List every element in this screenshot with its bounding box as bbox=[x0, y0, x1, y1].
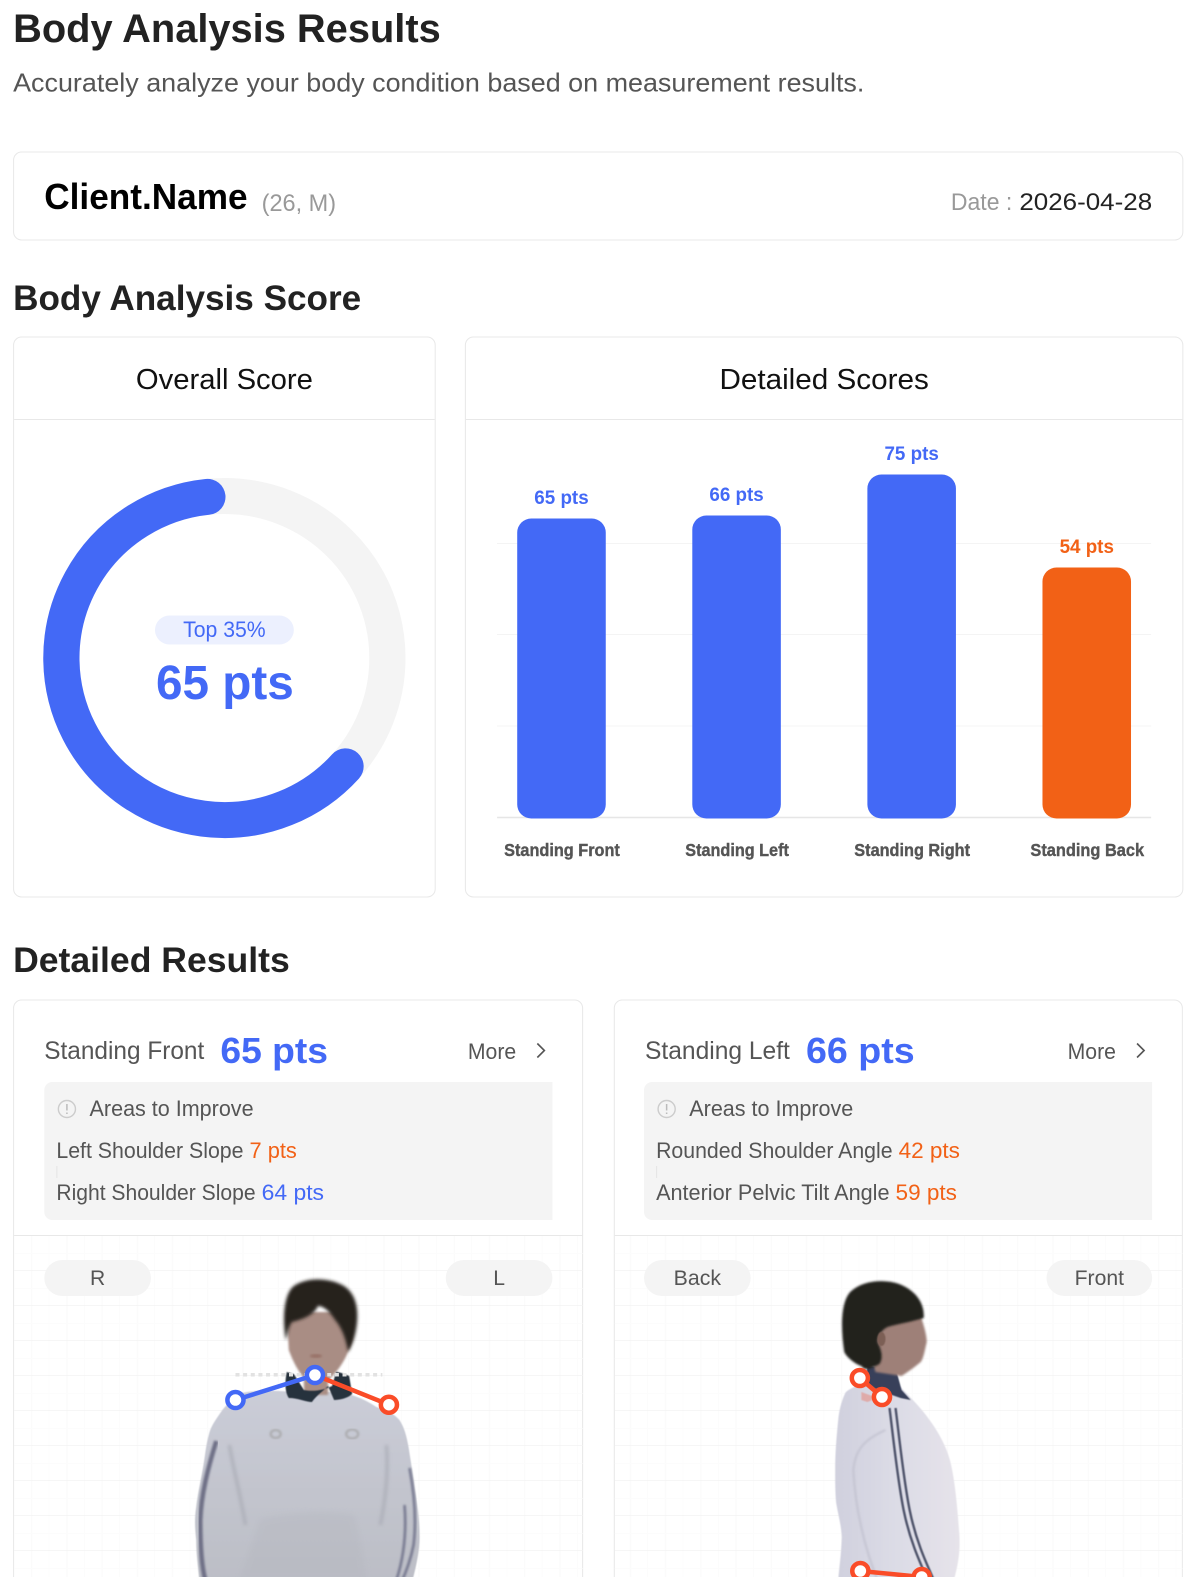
icon: alert bbox=[58, 1100, 75, 1118]
card header: standing left score: Standing Left bbox=[645, 1037, 790, 1065]
bar: standing right: Standing Right bbox=[854, 840, 970, 860]
label: R: R bbox=[90, 1267, 105, 1290]
marker: front pelvis bbox=[914, 1569, 930, 1577]
client age and sex: (26, M) bbox=[262, 190, 336, 217]
areas to improve box: Left Shoulder Slope bbox=[56, 1138, 244, 1163]
areas to improve box bbox=[644, 1082, 1152, 1220]
areas to improve box: Areas to Improve bbox=[90, 1096, 254, 1121]
date: 2026-04-28 bbox=[1019, 189, 1152, 216]
label: front: Front bbox=[1075, 1267, 1124, 1290]
marker: lower shoulder bbox=[874, 1389, 890, 1405]
areas to improve box: 42 pts bbox=[899, 1138, 960, 1163]
bar: standing front bbox=[504, 487, 620, 860]
card header: standing left score bbox=[645, 1030, 1144, 1071]
card header: standing left score: 66 pts bbox=[806, 1030, 915, 1071]
card header: standing left score: More bbox=[1068, 1039, 1116, 1064]
label: R bbox=[44, 1260, 151, 1296]
shoulder slope overlay bbox=[227, 1367, 397, 1413]
figure: front view person bbox=[195, 1279, 420, 1577]
posture overlay bbox=[852, 1370, 930, 1577]
panel: standing front result bbox=[14, 1000, 583, 1577]
areas to improve box: Rounded Shoulder Angle bbox=[656, 1138, 893, 1163]
bar: standing left bbox=[685, 484, 789, 860]
bar: standing front: 65 pts bbox=[534, 487, 589, 509]
overall score value: 65 pts bbox=[156, 656, 294, 710]
label: L bbox=[446, 1260, 552, 1296]
icon: alert bbox=[658, 1100, 675, 1118]
panel: detailed scores bbox=[465, 337, 1183, 897]
areas to improve box: 7 pts bbox=[250, 1138, 297, 1163]
panel: overall score bbox=[14, 337, 435, 897]
marker: left shoulder bbox=[381, 1397, 397, 1413]
bar: standing right bbox=[854, 443, 970, 860]
client name: Client.Name bbox=[44, 176, 248, 217]
percentile badge bbox=[155, 616, 294, 644]
areas to improve box bbox=[44, 1082, 552, 1220]
percentile badge: Top 35% bbox=[183, 617, 266, 642]
card header: standing front score: Standing Front bbox=[44, 1037, 204, 1065]
bar: standing left: 66 pts bbox=[709, 484, 764, 506]
marker: rear pelvis bbox=[852, 1563, 868, 1577]
bar: standing back: Standing Back bbox=[1030, 840, 1145, 860]
areas to improve box: Right Shoulder Slope bbox=[56, 1180, 256, 1205]
title: Body Analysis Results bbox=[13, 6, 441, 51]
bar: standing front: Standing Front bbox=[504, 840, 620, 860]
areas to improve box: 59 pts bbox=[896, 1180, 957, 1205]
marker: neck bbox=[307, 1367, 323, 1383]
bar: standing back bbox=[1030, 536, 1145, 860]
panel: standing left result bbox=[614, 1000, 1182, 1577]
bar: standing back: 54 pts bbox=[1060, 536, 1114, 558]
label: back: Back bbox=[674, 1267, 721, 1290]
card header: standing front score: More bbox=[468, 1039, 516, 1064]
label: front bbox=[1046, 1260, 1152, 1296]
card header: standing front score bbox=[44, 1030, 544, 1071]
areas to improve box: 64 pts bbox=[262, 1180, 324, 1205]
heading: body analysis score: Body Analysis Score bbox=[13, 279, 361, 318]
bar chart bbox=[497, 443, 1151, 860]
overall score heading: Overall Score bbox=[136, 364, 313, 396]
card header: standing front score: 65 pts bbox=[220, 1030, 328, 1071]
areas to improve box: Anterior Pelvic Tilt Angle bbox=[656, 1180, 890, 1205]
marker: upper shoulder bbox=[852, 1370, 868, 1386]
donut chart bbox=[61, 496, 387, 820]
areas to improve box: Areas to Improve bbox=[689, 1096, 853, 1121]
marker: right shoulder bbox=[227, 1392, 244, 1408]
panel: client info bbox=[14, 152, 1183, 240]
label: back bbox=[644, 1260, 751, 1296]
figure: side view person bbox=[835, 1281, 960, 1577]
bar: standing left: Standing Left bbox=[685, 840, 789, 860]
bar: standing right: 75 pts bbox=[884, 443, 939, 465]
label: L: L bbox=[493, 1267, 505, 1290]
date: Date : bbox=[951, 189, 1012, 216]
detailed scores heading: Detailed Scores bbox=[719, 364, 929, 396]
heading: detailed results: Detailed Results bbox=[13, 941, 290, 980]
subtitle: Accurately analyze your body condition based on measurement results. bbox=[13, 68, 864, 97]
date bbox=[951, 189, 1152, 216]
